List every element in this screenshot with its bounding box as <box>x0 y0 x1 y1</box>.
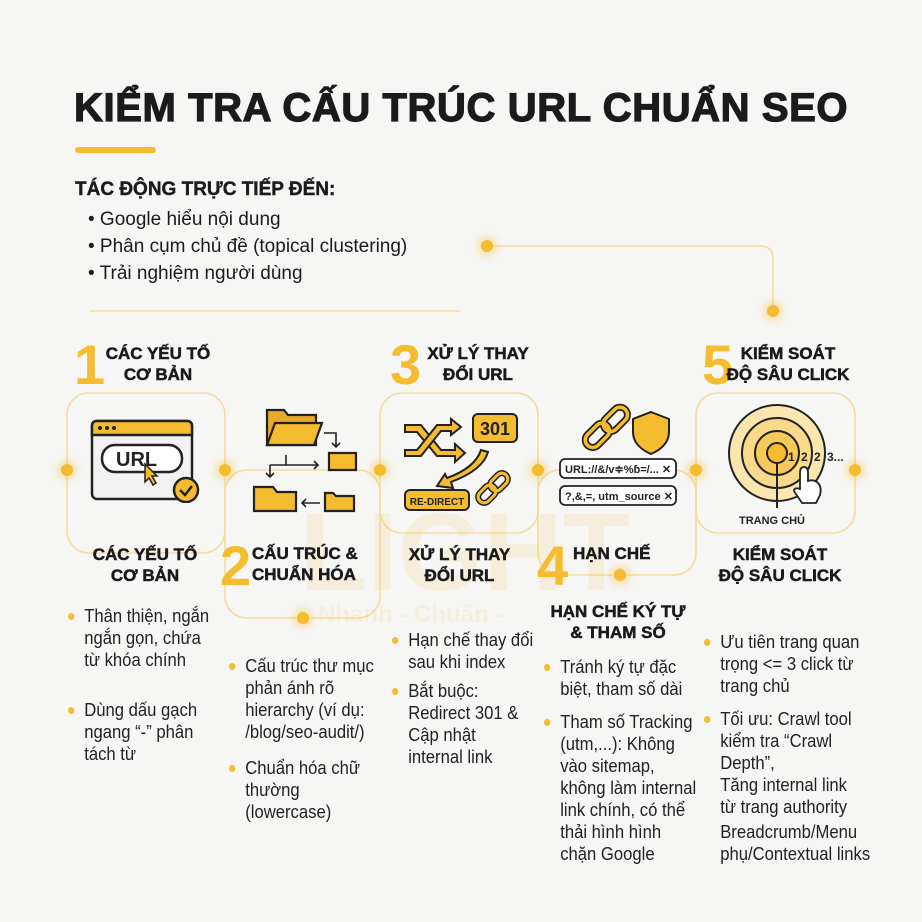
step 5 text: trọng <= 3 click từ <box>720 653 854 674</box>
step 3 text: Bắt buộc: <box>408 680 479 701</box>
step 3 text: Cập nhật <box>408 724 476 745</box>
icon: redirect 301: 301 <box>480 419 510 439</box>
step 5 sub heading <box>718 544 842 585</box>
icon: target click depth <box>728 404 844 527</box>
step 3 text: sau khi index <box>408 651 505 672</box>
watermark: Nhanh - Chuẩn - <box>318 601 503 628</box>
step 5 text: kiểm tra “Crawl <box>720 730 832 751</box>
step 3 text: Redirect 301 & <box>408 702 518 723</box>
step 4 header: 4 <box>537 534 568 597</box>
step 4 text: vào sitemap, <box>560 755 655 776</box>
icon: redirect 301 <box>404 413 518 511</box>
intro bullets: • Google hiểu nội dung <box>88 209 281 230</box>
step 3 sub heading: ĐỔI URL <box>425 566 494 585</box>
step 4 text: link chính, có thể <box>560 799 685 820</box>
step 1 header: CƠ BẢN <box>124 365 192 384</box>
step 1 sub heading <box>93 544 197 585</box>
step 4 text: Tránh ký tự đặc <box>560 656 676 677</box>
step 5 header <box>702 333 850 396</box>
step 3 sub heading <box>408 544 510 585</box>
step 1 sub heading: CƠ BẢN <box>111 566 179 585</box>
step 5 text: Tối ưu: Crawl tool <box>720 708 852 729</box>
step 2 text: Chuẩn hóa chữ <box>245 757 360 778</box>
step 5 header: KIỂM SOÁT <box>741 344 835 363</box>
step 1 header: CÁC YẾU TỐ <box>106 344 210 363</box>
watermark: LIGHT <box>300 491 630 614</box>
step 4 text <box>544 656 696 864</box>
title: KIỂM TRA CẤU TRÚC URL CHUẨN SEO <box>74 86 848 130</box>
step 1 sub heading: CÁC YẾU TỐ <box>93 545 197 564</box>
step 3 header: 3 <box>390 333 421 396</box>
icon: target click depth: 2 <box>814 450 821 464</box>
step 5 text: Tăng internal link <box>720 774 847 795</box>
step 4 sub heading: HẠN CHẾ KÝ TỰ <box>550 602 686 621</box>
step 3 text: internal link <box>408 746 492 767</box>
title underline <box>75 147 156 153</box>
icon: browser url <box>90 420 200 503</box>
step 2 text: Cấu trúc thư mục <box>245 655 374 676</box>
step 5 text: từ trang authority <box>720 796 847 817</box>
step 2 text: /blog/seo-audit/) <box>245 721 365 742</box>
step 4 text: biệt, tham số dài <box>560 678 682 699</box>
intro bullets <box>88 209 407 284</box>
step 2 header: CẤU TRÚC & <box>252 544 358 563</box>
step 2 header <box>220 534 358 597</box>
step 5 text: Breadcrumb/Menu <box>720 821 857 842</box>
step 3 sub heading: XỬ LÝ THAY <box>409 545 510 564</box>
icon: link shield and params: ?,&,=, utm_source ✕ <box>565 491 673 503</box>
step 2 text: phản ánh rõ <box>245 677 334 698</box>
step 5 header: ĐỘ SÂU CLICK <box>727 365 849 384</box>
icon: target click depth: 2 <box>801 450 808 464</box>
icon: target click depth: 1 <box>788 450 795 464</box>
step 4 text: không làm internal <box>560 777 696 798</box>
step 4 text: chặn Google <box>560 843 655 864</box>
step 5 text: phụ/Contextual links <box>720 843 870 864</box>
step 4 text: (utm,...): Không <box>560 733 675 754</box>
step 2 text: thường <box>245 779 300 800</box>
step 1 text <box>68 605 209 764</box>
step 3 header: ĐỔI URL <box>443 365 513 384</box>
step 3 header: XỬ LÝ THAY <box>427 344 529 363</box>
step 3 text <box>392 629 533 767</box>
step 4 text: Tham số Tracking <box>560 711 693 732</box>
intro heading: TÁC ĐỘNG TRỰC TIẾP ĐẾN: <box>75 179 335 200</box>
step 4 text: thải hình hình <box>560 821 661 842</box>
step 4 header <box>537 534 650 597</box>
step 1 text: ngang “-” phân <box>84 721 193 742</box>
icon: target click depth: 3... <box>827 450 844 464</box>
icon: link shield and params: URL://&/v≑%ɓ=/... ✕ <box>565 464 671 476</box>
step 1 text: từ khóa chính <box>84 649 186 670</box>
step 2 header: 2 <box>220 534 251 597</box>
step 5 text: trang chủ <box>720 675 790 696</box>
step 5 text <box>704 631 870 864</box>
step 2 text: hierarchy (ví dụ: <box>245 699 365 720</box>
step 5 sub heading: ĐỘ SÂU CLICK <box>719 566 841 585</box>
step 1 text: tách từ <box>84 743 136 764</box>
step 4 sub heading: & THAM SỐ <box>570 623 666 642</box>
step 2 header: CHUẨN HÓA <box>252 565 356 584</box>
icon: target click depth: TRANG CHỦ <box>739 514 805 527</box>
icon: browser url: URL <box>116 449 157 471</box>
icon: folders <box>252 408 358 512</box>
step 1 text: Thân thiện, ngắn <box>84 605 209 626</box>
step 1 header: 1 <box>74 333 105 396</box>
step 5 sub heading: KIỂM SOÁT <box>733 545 827 564</box>
icon: link shield and params <box>559 404 677 506</box>
step 1 text: ngắn gọn, chứa <box>84 627 201 648</box>
step 3 text: Hạn chế thay đổi <box>408 629 533 650</box>
step 1 header <box>74 333 210 396</box>
step 5 text: Ưu tiên trang quan <box>720 631 859 652</box>
step 5 header: 5 <box>702 333 733 396</box>
step 1 text: Dùng dấu gạch <box>84 699 197 720</box>
step 4 header: HẠN CHẾ <box>573 544 650 563</box>
step 5 text: Depth”, <box>720 752 775 773</box>
intro bullets: • Phân cụm chủ đề (topical clustering) <box>88 236 407 257</box>
intro bullets: • Trải nghiệm người dùng <box>88 263 303 284</box>
step 2 text <box>229 655 374 822</box>
step 2 text: (lowercase) <box>245 801 331 822</box>
step 4 sub heading <box>550 602 686 642</box>
icon: redirect 301: RE-DIRECT <box>410 497 464 508</box>
step 3 header <box>390 333 529 396</box>
